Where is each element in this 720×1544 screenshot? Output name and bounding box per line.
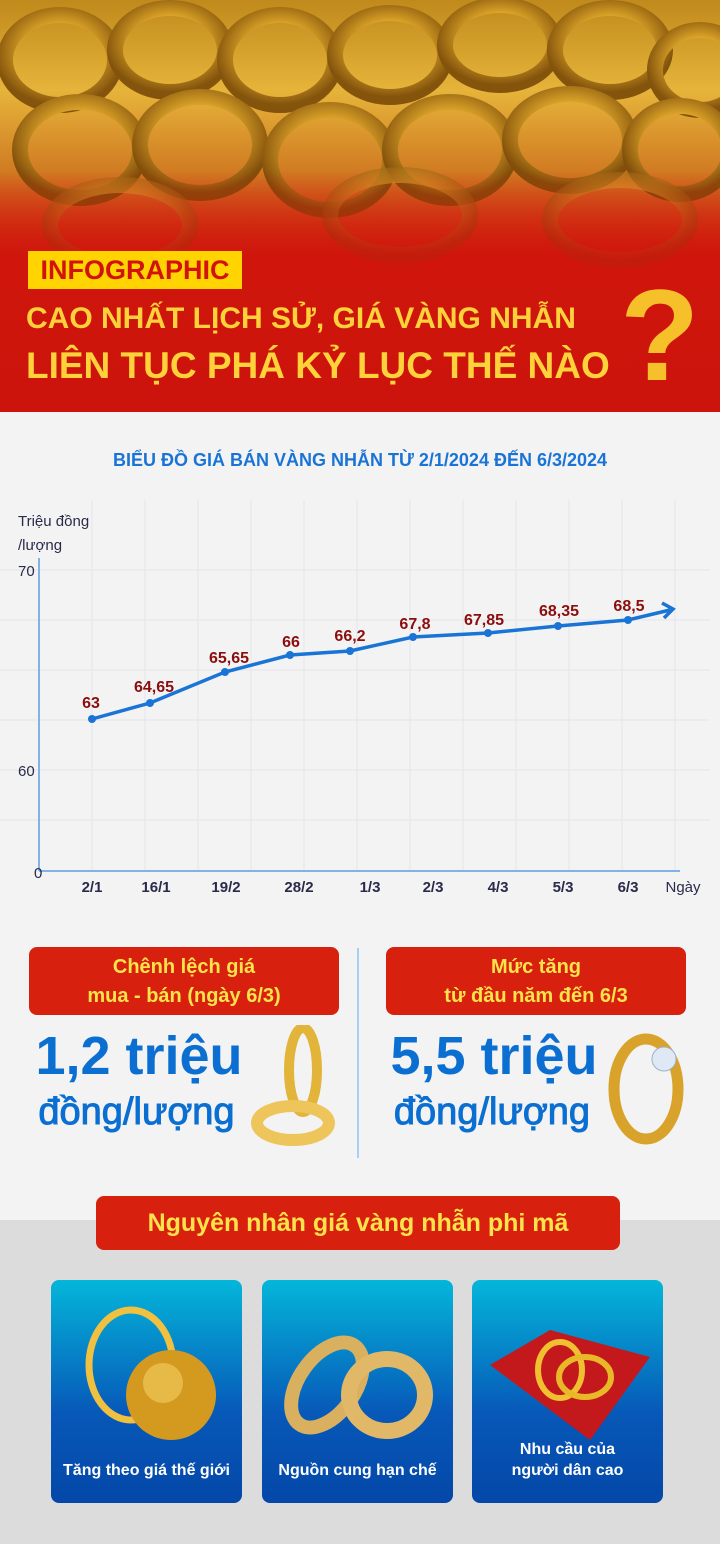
line chart: 68,35 (539, 603, 579, 620)
line chart: 64,65 (134, 679, 174, 696)
title (26, 301, 610, 386)
line chart: 66,2 (334, 628, 366, 645)
card: limited supply: Nguồn cung hạn chế (278, 1462, 437, 1479)
panel: price spread (29, 947, 339, 1146)
badge: INFOGRAPHIC: INFOGRAPHIC (40, 255, 230, 285)
panel: price spread: đồng/lượng (38, 1091, 235, 1133)
card: high demand: người dân cao (512, 1462, 623, 1479)
divider (357, 948, 359, 1158)
card: world price (51, 1280, 242, 1503)
title: LIÊN TỤC PHÁ KỶ LỤC THẾ NÀO (26, 345, 610, 386)
line chart: 66 (282, 634, 300, 651)
line chart: 6/3 (618, 879, 638, 896)
card: high demand (472, 1280, 663, 1503)
line chart: 2/1 (82, 879, 102, 896)
line chart: 28/2 (284, 879, 314, 896)
line chart: 1/3 (360, 879, 380, 896)
icon: ring and globe (86, 1306, 216, 1440)
bottom section background (0, 1220, 720, 1544)
title: CAO NHẤT LỊCH SỬ, GIÁ VÀNG NHẪN (26, 302, 576, 335)
line chart: 16/1 (141, 879, 171, 896)
panel: price spread: 1,2 triệu (35, 1026, 243, 1086)
badge: INFOGRAPHIC (28, 251, 242, 289)
line chart: 60 (18, 763, 35, 780)
line chart: Ngày (665, 879, 701, 896)
icon: two bands (284, 1336, 433, 1439)
icon: rings on red pillow (490, 1330, 650, 1440)
header banner (0, 0, 720, 412)
icon: question mark: ? (620, 262, 699, 408)
line chart: 2/3 (423, 879, 443, 896)
heading: causes (96, 1196, 620, 1250)
line chart (0, 500, 710, 896)
line chart: 67,85 (464, 612, 504, 629)
panel: yearly increase: 5,5 triệu (390, 1026, 598, 1086)
line chart: 70 (18, 563, 35, 580)
card: high demand: Nhu cầu của (520, 1441, 615, 1458)
icon: two gold rings (251, 1025, 335, 1146)
panel: yearly increase (386, 947, 686, 1144)
panel: price spread: mua - bán (ngày 6/3) (87, 985, 281, 1007)
line chart: 0 (34, 865, 42, 882)
icon: diamond ring (608, 1034, 684, 1144)
panel: price spread: Chênh lệch giá (113, 956, 255, 978)
chart title: BIỂU ĐỒ GIÁ BÁN VÀNG NHẪN TỪ 2/1/2024 ĐẾN 6/3/2024 (113, 450, 607, 470)
line chart: /lượng (18, 537, 62, 554)
card: limited supply (262, 1280, 453, 1503)
line chart: 63 (82, 695, 100, 712)
photo: gold rings (0, 0, 720, 268)
line chart: Triệu đồng (18, 513, 89, 530)
line chart: 68,5 (613, 598, 645, 615)
panel: yearly increase: đồng/lượng (394, 1091, 590, 1133)
panel: yearly increase: từ đầu năm đến 6/3 (444, 985, 628, 1007)
line chart: 65,65 (209, 650, 249, 667)
card: world price: Tăng theo giá thế giới (63, 1462, 230, 1479)
line chart: 4/3 (488, 879, 508, 896)
heading: causes: Nguyên nhân giá vàng nhẫn phi mã (148, 1209, 568, 1237)
line chart: 19/2 (211, 879, 241, 896)
line chart: 67,8 (399, 616, 431, 633)
panel: yearly increase: Mức tăng (491, 956, 581, 978)
line chart: 5/3 (553, 879, 573, 896)
